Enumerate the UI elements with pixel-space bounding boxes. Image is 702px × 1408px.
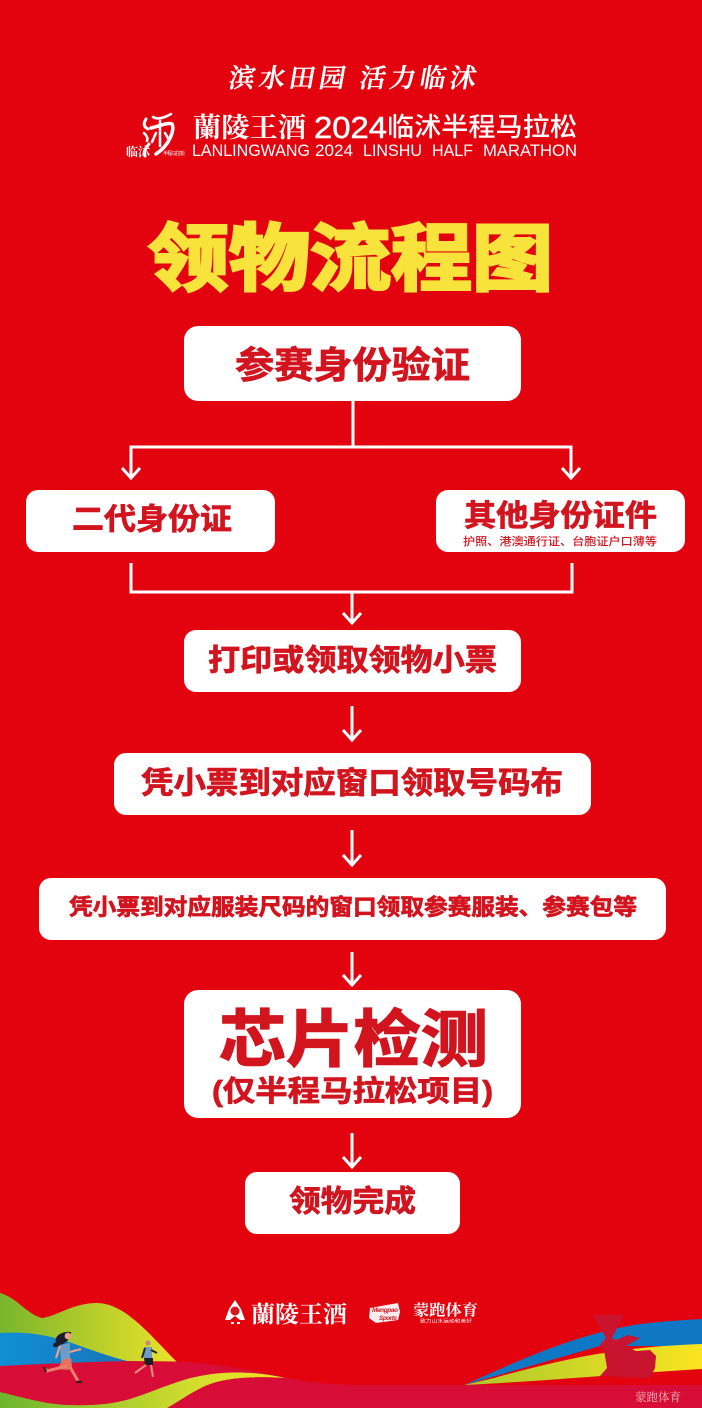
english name: MARATHON — [483, 142, 577, 160]
english name: LINSHU — [363, 142, 422, 160]
arrow — [343, 1133, 361, 1167]
sponsor name: 蘭陵王酒 — [251, 1302, 347, 1327]
arrow — [343, 706, 361, 740]
panel: collect bib — [114, 753, 591, 815]
panel: print ticket — [184, 630, 521, 692]
green hill — [0, 1293, 177, 1368]
event name — [192, 110, 577, 160]
event logo: 半程马拉松 — [163, 150, 185, 157]
step text: 凭小票到对应窗口领取号码布 — [141, 766, 563, 800]
sponsor logo: mengpao sports — [369, 1301, 478, 1324]
logo caption: 临沭 — [126, 144, 150, 159]
panel: complete — [245, 1172, 460, 1234]
runner: man — [135, 1340, 157, 1377]
step text: 二代身份证 — [72, 504, 232, 536]
runner: woman — [44, 1332, 82, 1382]
footer graphic: sculpture silhouette — [593, 1315, 656, 1378]
badge text: Mengpao — [372, 1307, 398, 1314]
step text: 领物完成 — [289, 1186, 416, 1218]
panel: chip check — [184, 990, 521, 1118]
yellow band — [464, 1344, 702, 1385]
english name: 2024 — [315, 142, 353, 160]
note text: 护照、港澳通行证、台胞证户口薄等 — [463, 534, 657, 548]
step text: 其他身份证件 — [464, 500, 657, 533]
icon: brush badge — [369, 1303, 400, 1323]
badge text: Sports — [379, 1315, 397, 1322]
step text: 参赛身份验证 — [235, 345, 470, 386]
arrow: merge to ticket step — [131, 563, 572, 623]
panel: identity verification — [184, 326, 521, 401]
watermark: 蒙跑体育 — [635, 1390, 681, 1404]
year: 2024 — [314, 110, 387, 145]
race name: 临沭半程马拉松 — [387, 112, 577, 142]
blue band — [464, 1319, 702, 1385]
title: 领物流程图 — [148, 219, 553, 300]
sponsor name: 蘭陵王酒 — [193, 113, 306, 143]
brand name: 蒙跑体育 — [413, 1301, 478, 1319]
english name — [192, 142, 577, 160]
footer graphic: right rainbow — [464, 1319, 702, 1385]
note text: (仅半程马拉松项目) — [212, 1075, 493, 1108]
blue hill — [0, 1333, 127, 1368]
panel: collect apparel — [39, 878, 666, 940]
footer graphic: lime ribbon — [0, 1372, 285, 1408]
brand tagline: 致力山水运动和美好 — [420, 1318, 473, 1324]
step text: 芯片检测 — [219, 1006, 488, 1075]
step text: 打印或领取领物小票 — [208, 644, 497, 678]
arrow — [343, 830, 361, 865]
panel: second generation id — [26, 490, 275, 552]
arrow — [343, 952, 361, 985]
slogan: 滨水田园 活力临沭 — [227, 64, 479, 93]
step text: 凭小票到对应服装尺码的窗口领取参赛服装、参赛包等 — [69, 894, 637, 920]
footer graphic: left hills — [0, 1293, 177, 1368]
english name: LANLINGWANG — [192, 142, 310, 160]
footer graphic: crimson ground — [0, 1361, 702, 1408]
icon: mascot — [225, 1300, 245, 1324]
panel: other id documents — [436, 490, 685, 552]
icon: brush mark — [144, 114, 173, 156]
arrow: split to two id types — [122, 401, 580, 478]
event logo — [126, 114, 185, 159]
english name: HALF — [432, 142, 473, 160]
sponsor logo: lanlingwang — [225, 1300, 347, 1327]
